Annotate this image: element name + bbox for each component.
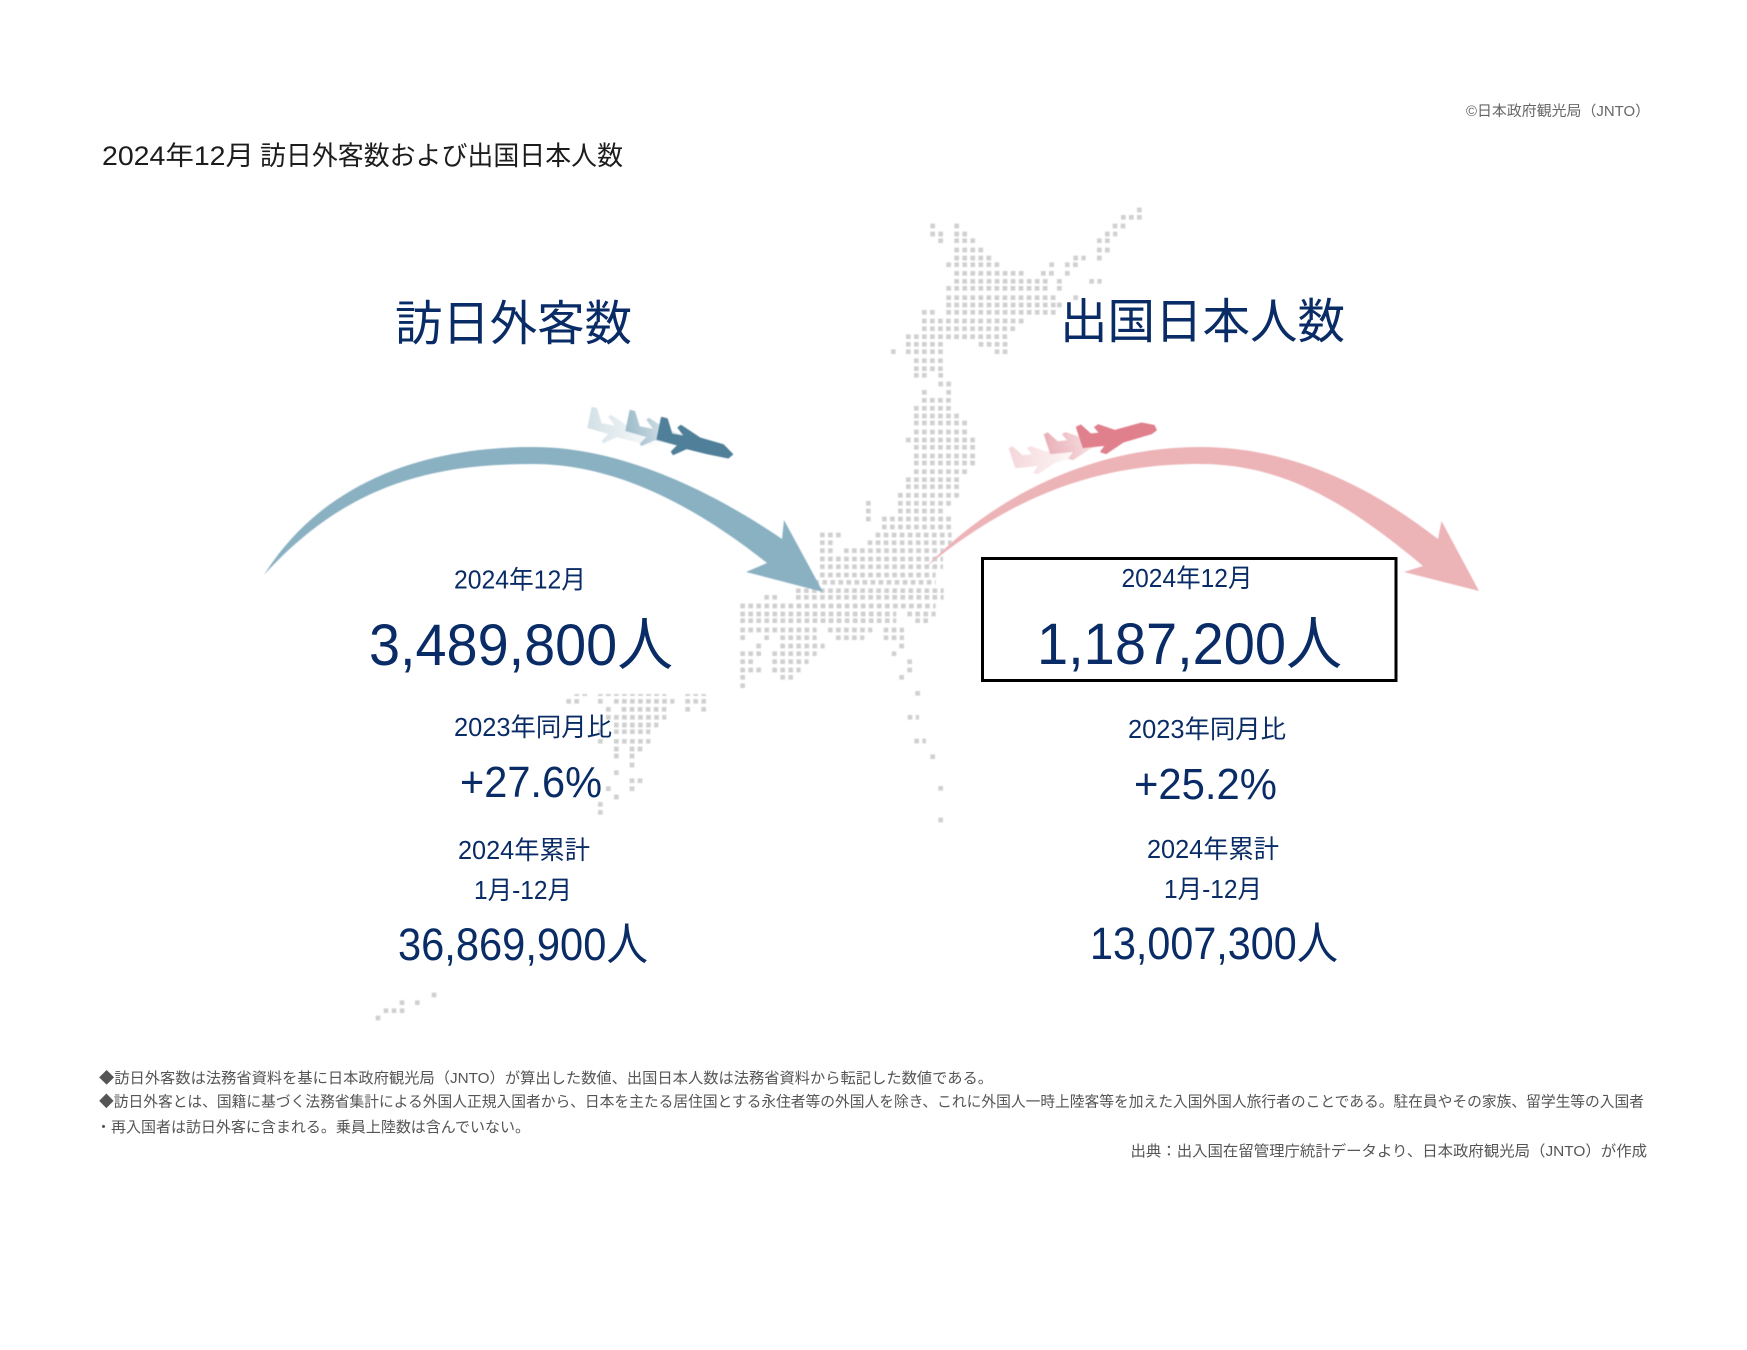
source: 出典：出入国在留管理庁統計データより、日本政府観光局（JNTO）が作成 [1130,1142,1647,1160]
copyright: ©日本政府観光局（JNTO） [1466,103,1650,120]
label: period: 1月-12月 [1164,876,1262,904]
dotted map of Japan [376,210,1142,1018]
label: month: 2024年12月 [1122,565,1252,593]
value: monthly visitors: 3,489,800人 [369,613,673,678]
highlight box [982,558,1396,680]
label: month: 2024年12月 [454,566,586,594]
value: cumulative visitors: 36,869,900人 [398,919,648,970]
value: monthly departures: 1,187,200人 [1037,612,1342,677]
label: year on year: 2023年同月比 [454,714,612,742]
note 3: ・再入国者は訪日外客に含まれる。乗員上陸数は含んでいない。 [96,1119,530,1136]
panel: visitors to Japan [264,298,823,970]
note 2: ◆訪日外客とは、国籍に基づく法務省集計による外国人正規入国者から、日本を主たる居住国とする永住者等の外国人を除き、これに外国人一時上陸客等を加えた入国外国人旅行者のことである。駐在員やその家族、留学生等の入国者 [99,1092,1644,1110]
heading: departures: 出国日本人数 [1060,296,1345,349]
footnotes [96,1069,1647,1160]
label: cumulative: 2024年累計 [458,837,590,865]
title: 訪日外客数および出国日本人数 [260,141,623,171]
arrow: inbound blue arc [264,447,823,592]
heading: visitors: 訪日外客数 [395,298,632,351]
value: cumulative departures: 13,007,300人 [1090,918,1338,969]
value: year on year: +27.6% [460,758,602,807]
label: period: 1月-12月 [474,877,572,905]
panel: Japanese departures [926,296,1479,969]
icon: blue airplane with trail [587,407,732,458]
title: 2024年12月 [102,141,254,171]
note 1: ◆訪日外客数は法務省資料を基に日本政府観光局（JNTO）が算出した数値、出国日本人数は法務省資料から転記した数値である。 [99,1069,993,1087]
label: year on year: 2023年同月比 [1128,716,1286,744]
value: year on year: +25.2% [1134,760,1277,809]
label: cumulative: 2024年累計 [1147,836,1279,864]
icon: pink airplane with trail [1009,423,1156,474]
arrow: outbound pink arc [926,447,1479,591]
title [102,141,623,171]
